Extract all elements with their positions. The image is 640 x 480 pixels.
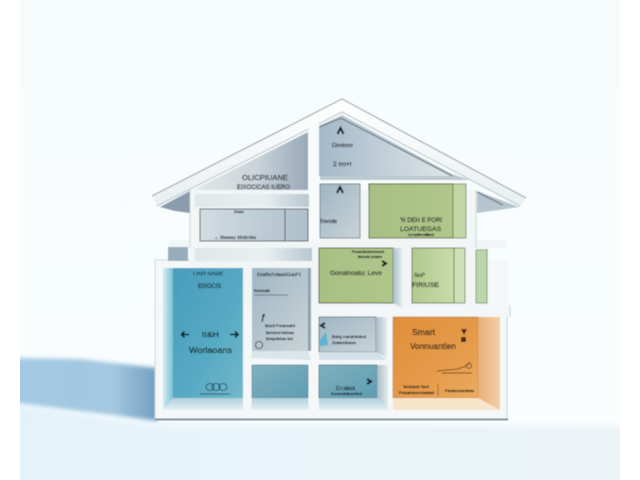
- panel: mid green room: Gonalnoatu: Leve: [330, 270, 383, 277]
- panel: small gray-blue room: [319, 317, 387, 360]
- panel: mid green room: [319, 248, 402, 308]
- panel: left gable: EIXOCICAS IUERO: [237, 184, 290, 191]
- mid green labels: Ponanlunlenmned: [352, 250, 384, 254]
- gable heading: OLICPIUANE: [242, 173, 288, 182]
- panel: orange room: Fanstoonssnleas: [445, 389, 474, 393]
- panel: small gray-blue room: Zolanofuson: [332, 340, 356, 345]
- panel: gray info room: Rorutosiin: [254, 289, 270, 293]
- orange room heading: Smart: [412, 328, 436, 337]
- panel: small gray-blue room: Bsiq naninfoled: [332, 334, 366, 339]
- panel: upper green room: [369, 184, 466, 238]
- icon: blue marker: [319, 332, 328, 346]
- house body frame: [155, 124, 510, 420]
- gray room labels: DafsIVasIGaFI: [257, 272, 301, 278]
- panel: blue room: Worlaoans: [189, 346, 232, 355]
- panel: mid green room right: SnP: [414, 273, 426, 279]
- panel: blue room: [163, 268, 243, 410]
- panel: right gable: [319, 118, 452, 176]
- orange room footers: Tandsanre Ifaurt: [403, 385, 429, 389]
- panel: orange room: [393, 317, 500, 410]
- attic labels: Smart: [234, 210, 244, 214]
- icon: devices: [200, 384, 230, 394]
- panel: orange room: Ponsaroluennmanlad: [399, 391, 434, 395]
- panel: mid green room right: [412, 248, 487, 303]
- icon: right arrow: [367, 379, 371, 384]
- panel: strip below attic: [168, 247, 312, 261]
- panel: small gray room upper right: Rovonts: [320, 219, 337, 225]
- icon: person: [461, 329, 467, 342]
- panel: left attic room: [195, 194, 309, 241]
- panel: left gable: [193, 132, 308, 191]
- icon: left arrow: [182, 332, 189, 338]
- icon: up arrow: [337, 187, 343, 193]
- panel: blue room: EIXOCIS: [198, 284, 221, 290]
- icon: right arrow: [382, 261, 386, 266]
- icon: left arrow: [321, 323, 325, 328]
- gable labels: Elenkner: [332, 143, 353, 149]
- panel: mid green room: Ilesnoln Ionwne: [358, 255, 382, 259]
- panel: upper green room: LOATUEGAS: [400, 226, 442, 233]
- roof: [152, 99, 526, 213]
- green room labels: 'N DEH E PORI: [400, 218, 442, 224]
- icon: right arrow: [230, 332, 238, 338]
- icon: clock: [255, 341, 263, 349]
- panel: mid green room right: FIRIUSE: [412, 282, 439, 289]
- panel: small gray room upper right: [320, 184, 360, 238]
- cast shadow on floor: [10, 358, 157, 421]
- house: [152, 99, 526, 420]
- panel: gray info room: Benmrol Iofonas: [266, 330, 294, 335]
- panel: orange room: Vonnuantlen: [410, 342, 456, 351]
- panel: upper green room: Ionafilenfilled: [408, 233, 434, 237]
- panel: lower teal room right: Ilonnolnloonfed: [331, 392, 362, 396]
- panel: right gable: 2 eo+r: [333, 162, 352, 168]
- icon: reclining figure line: [437, 362, 472, 373]
- panel: gray info room: [251, 268, 311, 360]
- panel: gray info room: Brespniofuso Isnl: [266, 337, 293, 341]
- panel: lower teal room right: Ec:alant: [336, 386, 355, 392]
- panel: gray info room: Bnsnf Ponamuird: [265, 323, 295, 328]
- blue room heading: I IAFI GAGE: [193, 271, 223, 276]
- panel: blue room: tI&H: [202, 332, 219, 339]
- panel: left attic room: → Ifewso 6h6H6s: [213, 235, 257, 241]
- panel: lower teal room right: [319, 365, 388, 410]
- panel: gray info room: ƒ: [261, 313, 266, 322]
- panel: lower teal room: [251, 365, 309, 410]
- icon: up arrow: [338, 128, 344, 134]
